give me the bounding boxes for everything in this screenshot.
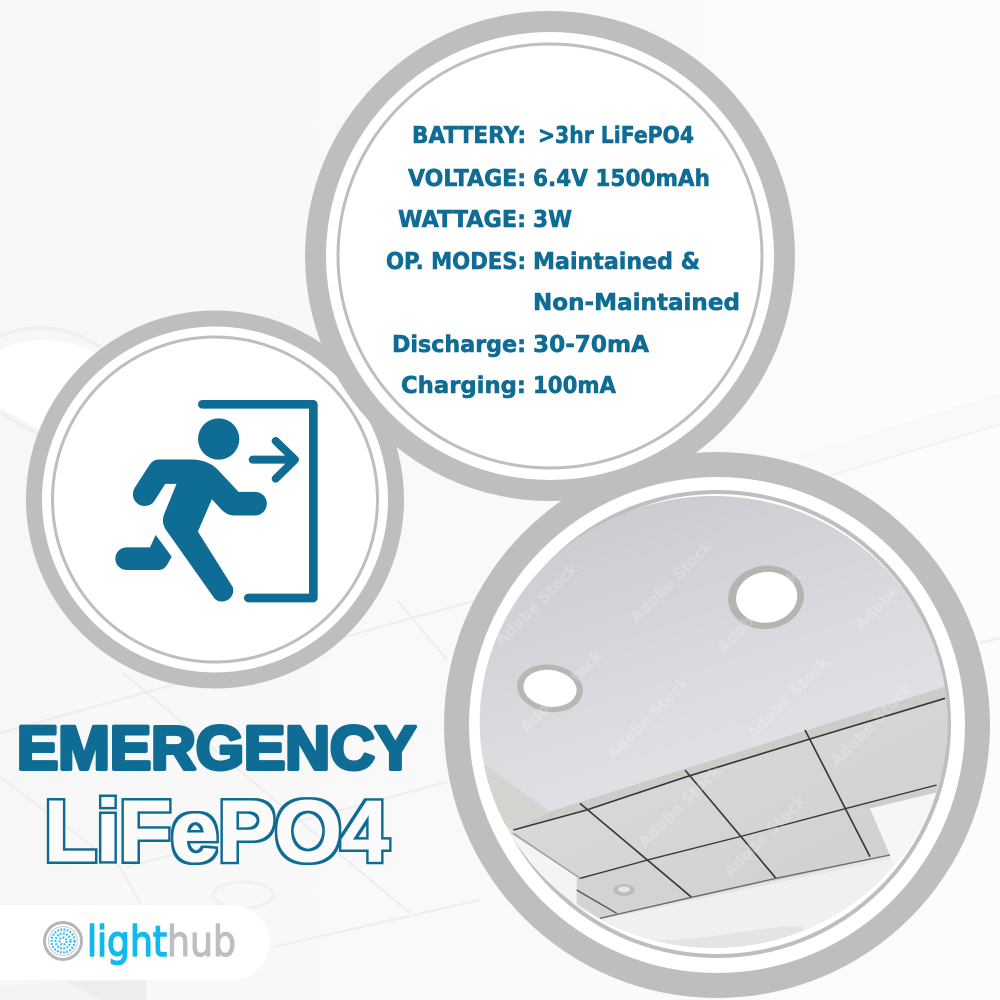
spec labels: BATTERY: xyxy=(412,123,526,149)
watermarks: Adobe Stock xyxy=(635,761,725,851)
spec values: Non-Maintained xyxy=(533,290,740,316)
panel: ceiling photo circle xyxy=(444,452,990,998)
watermarks xyxy=(498,542,903,878)
spec labels: OP. MODES: xyxy=(386,249,526,275)
icon: lighthub dotted ring xyxy=(44,922,82,960)
watermarks: Adobe Stock xyxy=(713,566,803,656)
watermarks: Adobe Stock xyxy=(827,680,917,769)
spec labels xyxy=(386,123,526,399)
watermarks: Adobe Stock xyxy=(720,791,810,881)
watermarks: Adobe Stock xyxy=(627,536,717,626)
title: LiFePO4 outlined: LiFePO4 xyxy=(44,783,389,880)
spec labels: WATTAGE: xyxy=(398,207,526,233)
spec labels: Discharge: xyxy=(392,332,526,358)
title: EMERGENCY: EMERGENCY xyxy=(17,714,416,782)
watermarks: Adobe Stock xyxy=(603,673,693,763)
spec labels: Charging: xyxy=(401,373,526,399)
spec labels: VOLTAGE: xyxy=(408,166,526,192)
logo: lighthub badge xyxy=(0,905,270,980)
icon: running person and exit door xyxy=(115,404,313,601)
logo wordmark: light xyxy=(87,917,167,966)
spec values xyxy=(533,123,740,399)
spec values: >3hr LiFePO4 xyxy=(538,123,694,149)
spec values: 30-70mA xyxy=(533,332,649,358)
watermarks: Adobe Stock xyxy=(852,543,942,633)
spec values: 6.4V 1500mAh xyxy=(533,166,710,192)
spec values: 3W xyxy=(533,207,572,233)
logo wordmark: hub xyxy=(167,917,236,966)
photo: ceiling with round lights xyxy=(470,490,960,963)
spec values: Maintained & xyxy=(533,249,700,275)
watermarks: Adobe Stock xyxy=(517,646,607,736)
panel: exit icon circle xyxy=(26,310,404,688)
panel: specifications circle xyxy=(305,11,795,501)
watermarks: Adobe Stock xyxy=(492,560,582,649)
spec values: 100mA xyxy=(533,373,616,399)
watermarks: Adobe Stock xyxy=(743,653,833,743)
